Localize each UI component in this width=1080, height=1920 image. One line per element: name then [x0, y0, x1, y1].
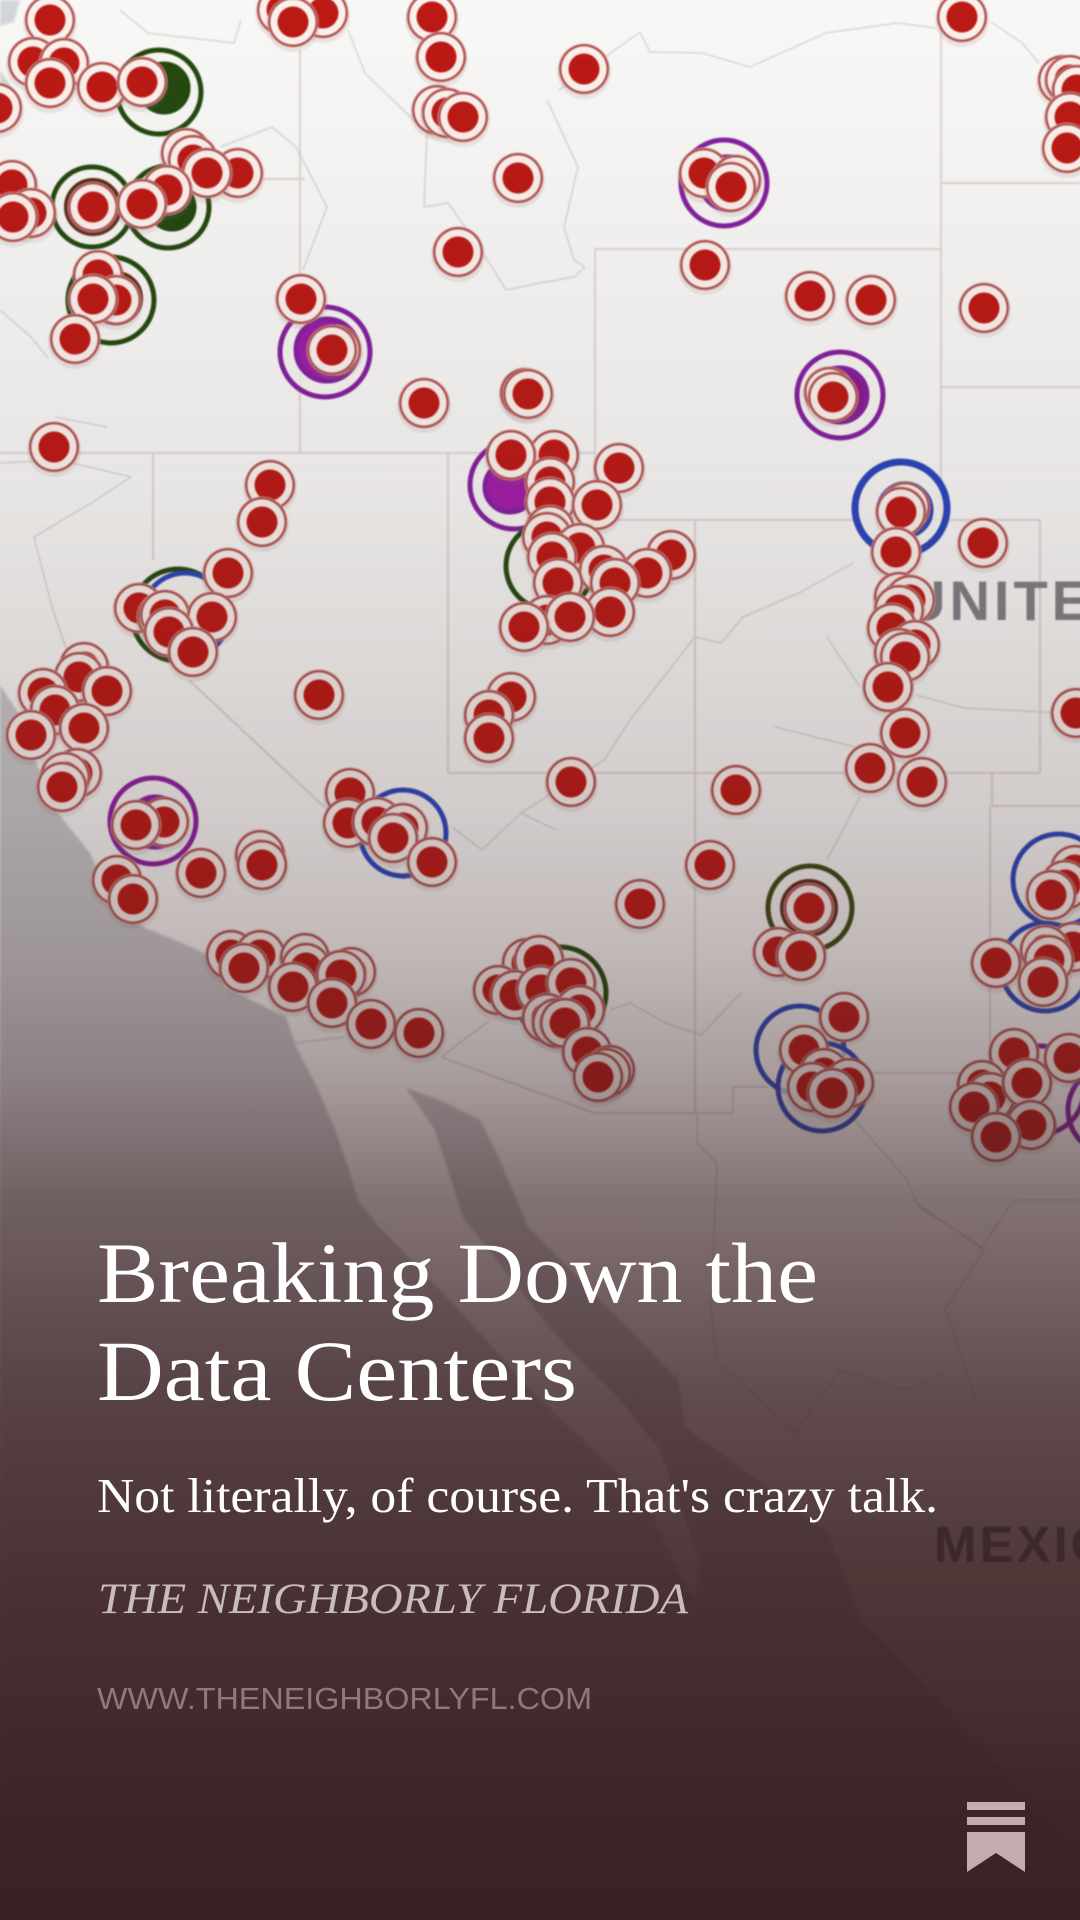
markers: northwest [0, 0, 555, 477]
ring: blue Omaha [855, 462, 947, 554]
icon: Substack bookmark [967, 1802, 1025, 1872]
ring: purple Idaho [280, 307, 370, 397]
markers: southern California coast [204, 930, 446, 1063]
ring: purple California [110, 778, 196, 864]
markers: Utah and Colorado [462, 430, 698, 812]
map sea: Pacific and Gulf of California [0, 685, 1080, 1920]
markers: north central [557, 0, 1080, 427]
title: Data Centers [97, 1323, 577, 1419]
subtitle: Not literally, of course. That's crazy talk. [97, 1468, 938, 1523]
map sea: Puget Sound [0, 0, 20, 100]
markers: Nevada and California [4, 460, 459, 929]
ring: blue Dallas [1001, 834, 1080, 1011]
markers: Kansas and Nebraska corridor [613, 482, 1080, 934]
ring: green Denver [506, 522, 594, 610]
ring: blue Las Vegas [360, 790, 446, 876]
title: Breaking Down the [97, 1225, 818, 1321]
ring: green northwest 2 [52, 167, 132, 247]
ring: blue El Paso pair [756, 1006, 866, 1131]
rivers and coast lines [0, 10, 1080, 1433]
ring: purple North Dakota [681, 140, 767, 226]
markers: New Mexico and Texas [751, 844, 1080, 1167]
website url: WWW.THENEIGHBORLYFL.COM [97, 1681, 592, 1716]
ring: green Albuquerque south [768, 866, 852, 950]
publication name: THE NEIGHBORLY FLORIDA [98, 1576, 689, 1623]
ring: purple Texas south [996, 1046, 1080, 1154]
ring: green Phoenix [514, 947, 606, 1039]
rings: data center clusters [52, 50, 1080, 1154]
markers: Arizona [471, 934, 637, 1107]
ring: green northwest 3 [127, 166, 209, 248]
ring: green northwest 1 [117, 50, 201, 134]
ring: purple Nebraska [797, 352, 883, 438]
ring: Reno green and blue [132, 569, 228, 661]
title [97, 1225, 818, 1419]
state borders [0, 0, 1080, 1113]
ring: green northwest 4 [68, 257, 154, 343]
ring: purple Utah [470, 441, 558, 529]
